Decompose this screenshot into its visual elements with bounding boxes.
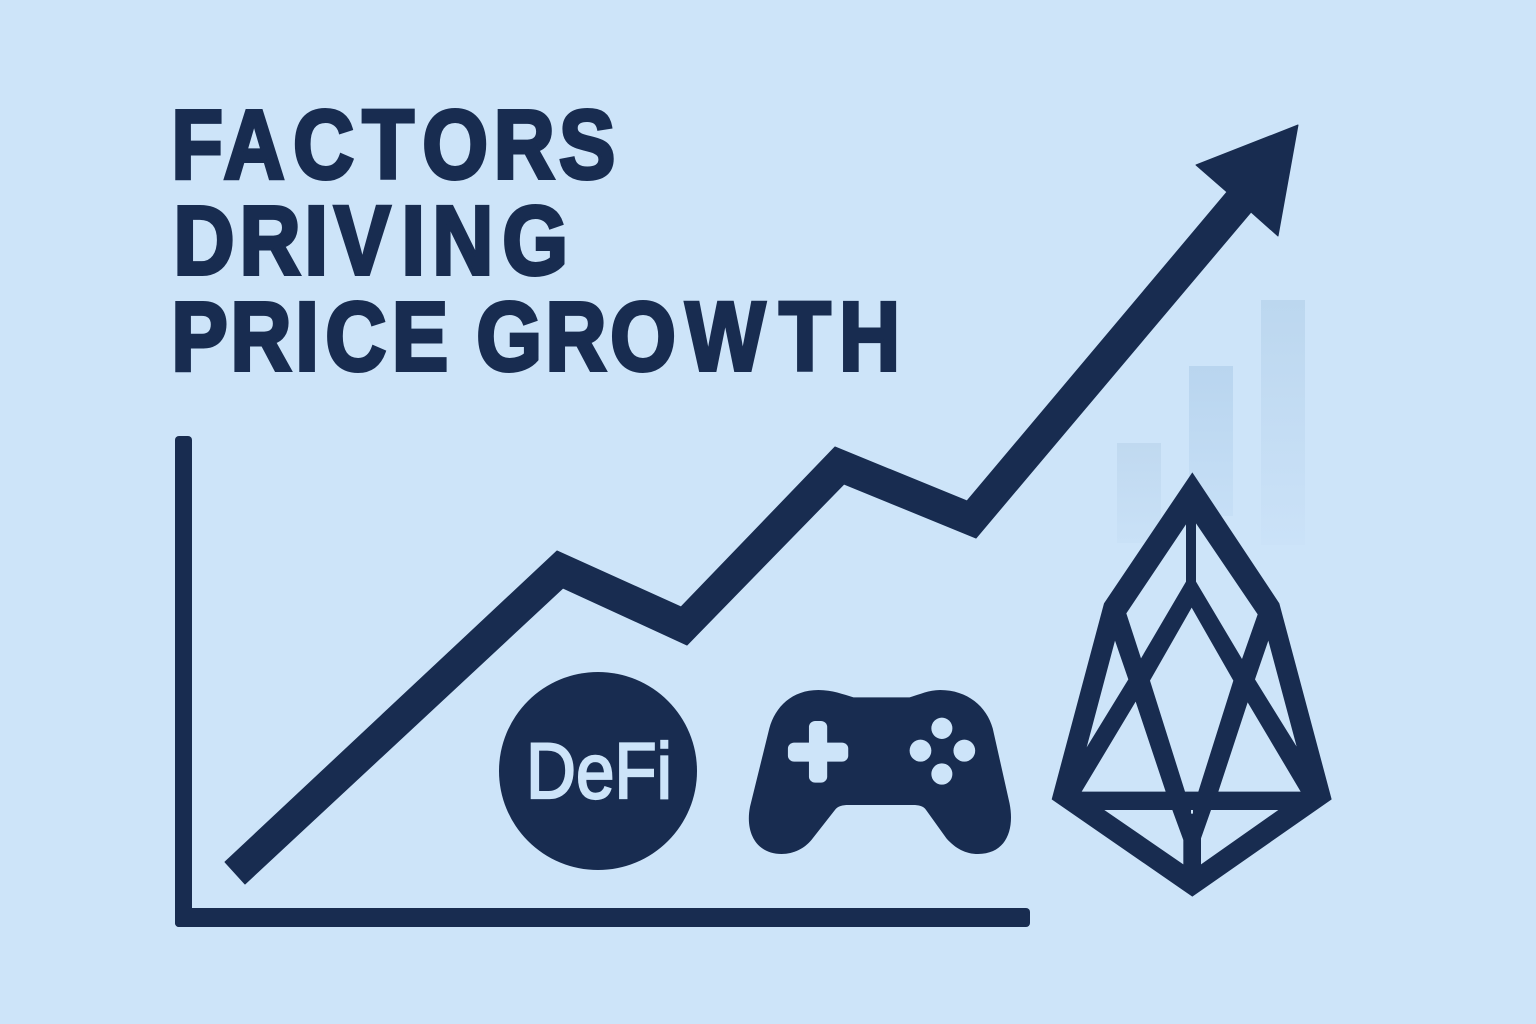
icon: DeFi coin: DeFi [526, 726, 672, 815]
icon: game controller [749, 690, 1011, 854]
rising arrow [225, 125, 1298, 884]
background bars [1117, 300, 1305, 545]
title: DRIVING [174, 188, 568, 295]
chart axes [175, 436, 1030, 927]
title [171, 92, 900, 391]
title: PRICE GROWTH [171, 284, 900, 391]
title: FACTORS [171, 92, 615, 199]
icon: DeFi coin [499, 672, 697, 870]
icon: EOS crystal logo [1052, 472, 1332, 897]
